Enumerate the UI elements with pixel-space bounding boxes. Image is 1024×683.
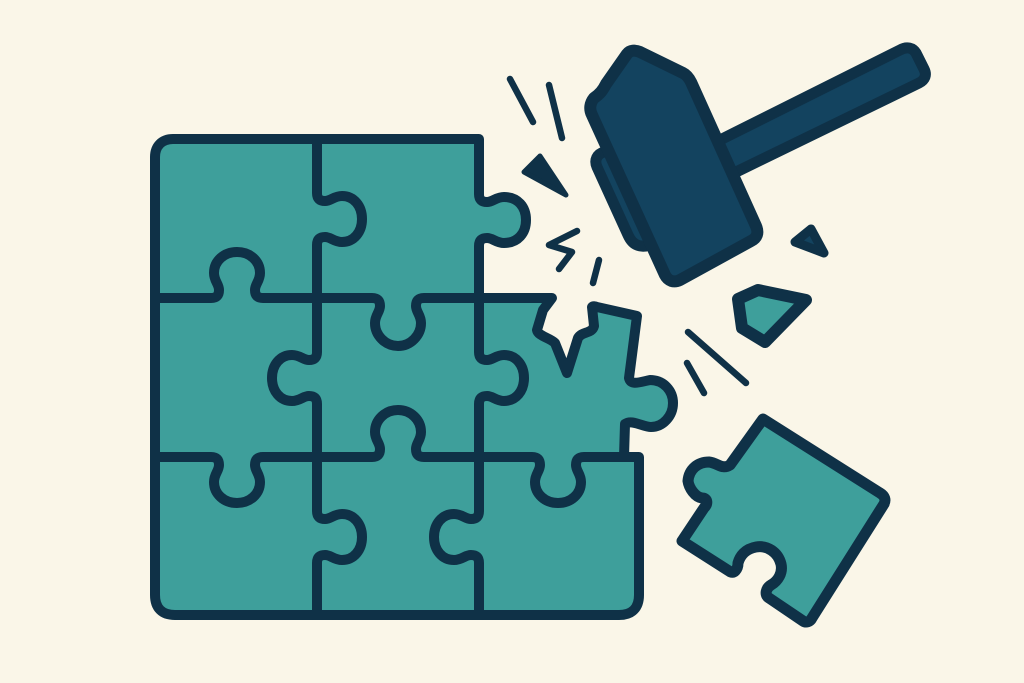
impact line	[510, 79, 533, 122]
shard: small triangle	[795, 229, 824, 253]
interlocking seam: bottom row vertical	[317, 457, 362, 615]
impact line	[688, 332, 746, 383]
hammer head	[590, 51, 757, 281]
interlocking seam: bottom row right	[434, 457, 479, 615]
interlocking seam: upper horizontal left	[155, 252, 317, 298]
impact lines	[510, 79, 746, 393]
puzzle board outline	[155, 139, 673, 615]
interlocking seam: middle row vertical	[272, 298, 317, 457]
interlocking seam: lower horizontal right	[479, 457, 639, 503]
interlocking seam: top row vertical	[317, 139, 362, 298]
broken puzzle piece	[682, 419, 885, 622]
impact tick	[593, 260, 599, 283]
hammer handle	[718, 48, 925, 174]
hammer	[590, 48, 925, 281]
shard: teal fragment	[738, 290, 806, 342]
puzzle: assembled board	[155, 139, 673, 615]
interlocking seam: upper horizontal middle	[317, 298, 479, 346]
interlocking seam: lower horizontal left	[155, 457, 317, 503]
impact line	[687, 363, 704, 393]
interlocking seam: lower horizontal middle	[317, 410, 479, 457]
interlocking seam: middle row right	[479, 298, 524, 457]
shard: dark fragment	[524, 156, 566, 195]
impact lightning mark	[549, 231, 577, 269]
hammer rear face strip	[596, 146, 660, 246]
impact line	[549, 85, 562, 138]
